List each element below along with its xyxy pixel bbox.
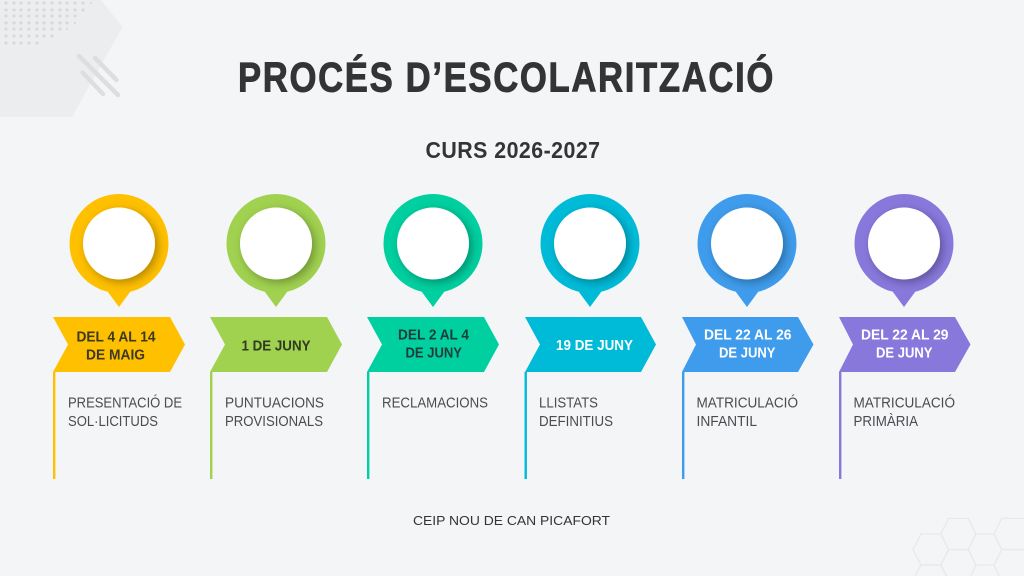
- timeline line 3: [367, 372, 369, 479]
- label 5: MATRICULACIÓ: [696, 394, 798, 412]
- decoration: top-left hexagon with dots and stripes: [0, 0, 122, 117]
- label 1: PRESENTACIÓ DE: [68, 394, 182, 412]
- timeline line 1: [53, 372, 55, 479]
- date arrow 3: DE JUNY: [406, 346, 462, 362]
- label 4: DEFINITIUS: [539, 414, 613, 430]
- subtitle: CURS 2026-2027: [426, 137, 600, 163]
- date arrow 2: 1 DE JUNY: [242, 338, 311, 354]
- step 4: [524, 194, 656, 479]
- date arrow 6: DE JUNY: [876, 346, 933, 362]
- step 1: [53, 194, 185, 479]
- timeline line 6: [839, 372, 841, 479]
- date arrow 2: [210, 317, 342, 372]
- pin marker 4: [540, 194, 640, 307]
- date arrow 1: [53, 317, 185, 372]
- step 3: [367, 194, 499, 479]
- label 4: [539, 396, 613, 430]
- pin marker 5: [698, 194, 796, 307]
- timeline line 5: [682, 372, 684, 479]
- step 2: [210, 194, 342, 479]
- label 5: [696, 394, 798, 430]
- label 5: INFANTIL: [696, 414, 757, 430]
- label 1: [68, 394, 182, 430]
- timeline line 4: [524, 372, 527, 479]
- date arrow 5: [682, 317, 814, 372]
- timeline line 2: [210, 372, 212, 479]
- label 2: [225, 396, 324, 430]
- label 6: PRIMÀRIA: [854, 413, 918, 430]
- date arrow 6: DEL 22 AL 29: [861, 328, 948, 344]
- label 1: SOL·LICITUDS: [68, 414, 158, 430]
- label 2: PUNTUACIONS: [225, 396, 324, 412]
- date arrow 1: DEL 4 AL 14: [76, 330, 156, 346]
- pin marker 2: [226, 194, 326, 307]
- pin marker 3: [384, 194, 482, 307]
- decoration: bottom-right honeycomb: [913, 518, 1024, 576]
- label 2: PROVISIONALS: [225, 414, 323, 430]
- label 6: MATRICULACIÓ: [854, 394, 955, 412]
- date arrow 3: [367, 317, 499, 372]
- date arrow 1: DE MAIG: [86, 348, 145, 364]
- label 4: LLISTATS: [539, 396, 598, 412]
- pin marker 1: [70, 194, 168, 307]
- title: PROCÉS D’ESCOLARITZACIÓ: [238, 52, 775, 100]
- pin marker 6: [854, 194, 954, 307]
- footer: CEIP NOU DE CAN PICAFORT: [413, 513, 610, 528]
- date arrow 3: DEL 2 AL 4: [398, 328, 469, 344]
- label 3: RECLAMACIONS: [382, 396, 488, 412]
- date arrow 5: DEL 22 AL 26: [704, 328, 792, 344]
- date arrow 4: 19 DE JUNY: [556, 338, 633, 354]
- date arrow 4: [525, 317, 656, 372]
- step 5: [682, 194, 814, 479]
- label 6: [854, 394, 955, 430]
- date arrow 6: [839, 317, 970, 372]
- date arrow 5: DE JUNY: [719, 346, 776, 362]
- step 6: [839, 194, 970, 479]
